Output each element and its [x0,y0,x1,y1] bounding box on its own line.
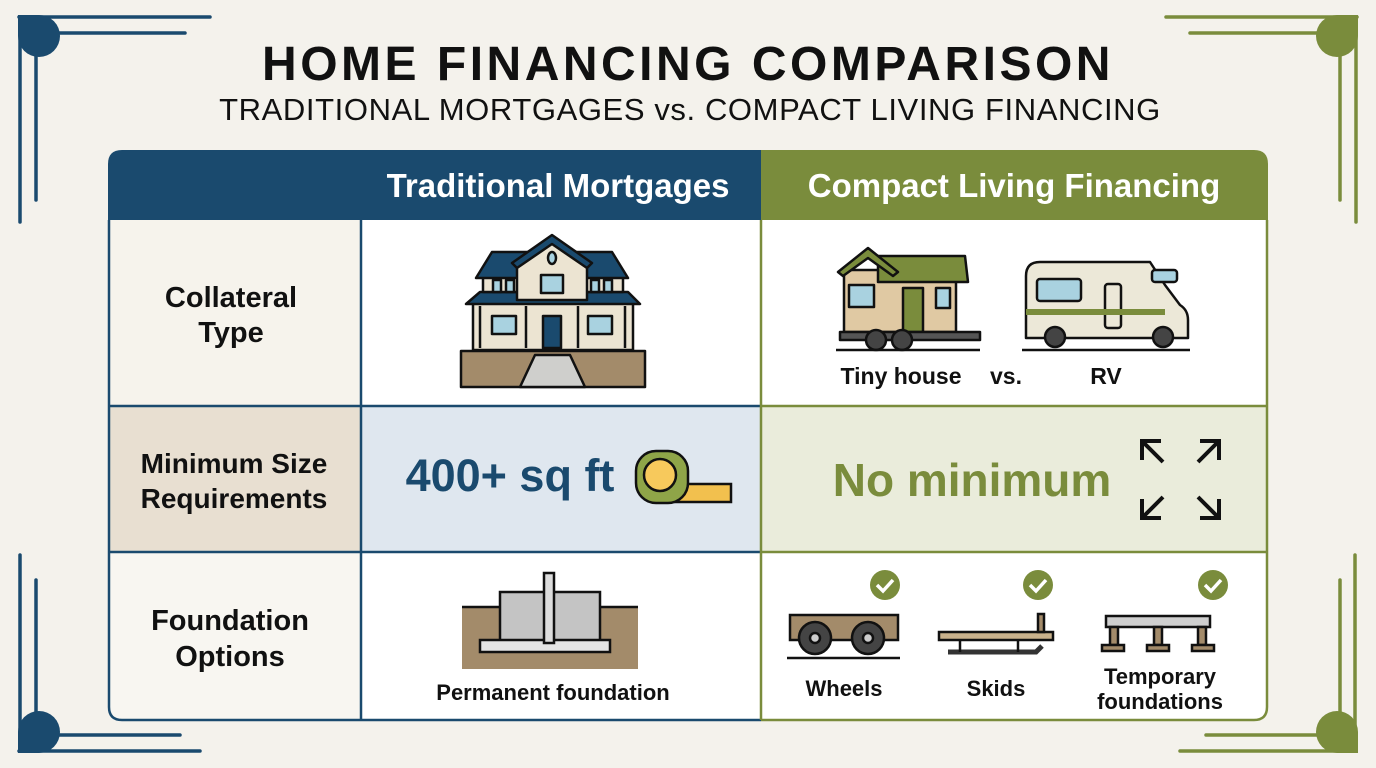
header: compact: Compact Living Financing [808,167,1220,204]
cell backgrounds [110,220,361,405]
value: 400+ sq ft: 400+ sq ft [406,450,614,501]
icon: tape measure [636,451,731,503]
comparison table: Skids [967,676,1025,701]
grid lines [109,220,761,720]
corner decoration: top-left [18,15,210,222]
comparison table [108,150,1268,720]
row label: collateral type: Type [198,317,264,349]
corner decoration: top-right [1166,15,1358,222]
labels: tiny house vs RV: Tiny house [840,363,962,389]
row label: foundation: Foundation [151,605,309,637]
icon: traditional house [461,235,645,387]
corner decoration: bottom-left [18,555,200,753]
icon: temporary foundations with check [1102,570,1228,651]
comparison table: Wheels [805,676,883,701]
row label: foundation: Options [175,641,285,673]
header: traditional: Traditional Mortgages [387,167,729,204]
icon: wheels with check [787,570,900,658]
comparison table: RV [1090,363,1122,389]
value: no minimum: No minimum [833,454,1111,506]
header: compact [761,150,1268,220]
comparison table: Temporary [1104,664,1216,689]
icon: permanent foundation [462,573,638,669]
icon: skids with check [939,570,1053,652]
row label: minimum size: Minimum Size [141,448,327,479]
subtitle: TRADITIONAL MORTGAGES vs. COMPACT LIVING FINANCING [219,92,1161,127]
row label: collateral type: Collateral [165,282,297,314]
header: traditional [108,150,761,220]
comparison table: Permanent foundation [436,680,670,705]
icon: RV [1022,262,1190,350]
corner decoration: bottom-right [1180,555,1358,753]
comparison table: vs. [990,363,1022,389]
row label: minimum size: Requirements [141,483,327,514]
comparison table: foundations [1097,689,1223,714]
icon: tiny house [836,248,980,350]
icon: expand arrows [1142,441,1219,518]
title: HOME FINANCING COMPARISON [262,38,1114,91]
